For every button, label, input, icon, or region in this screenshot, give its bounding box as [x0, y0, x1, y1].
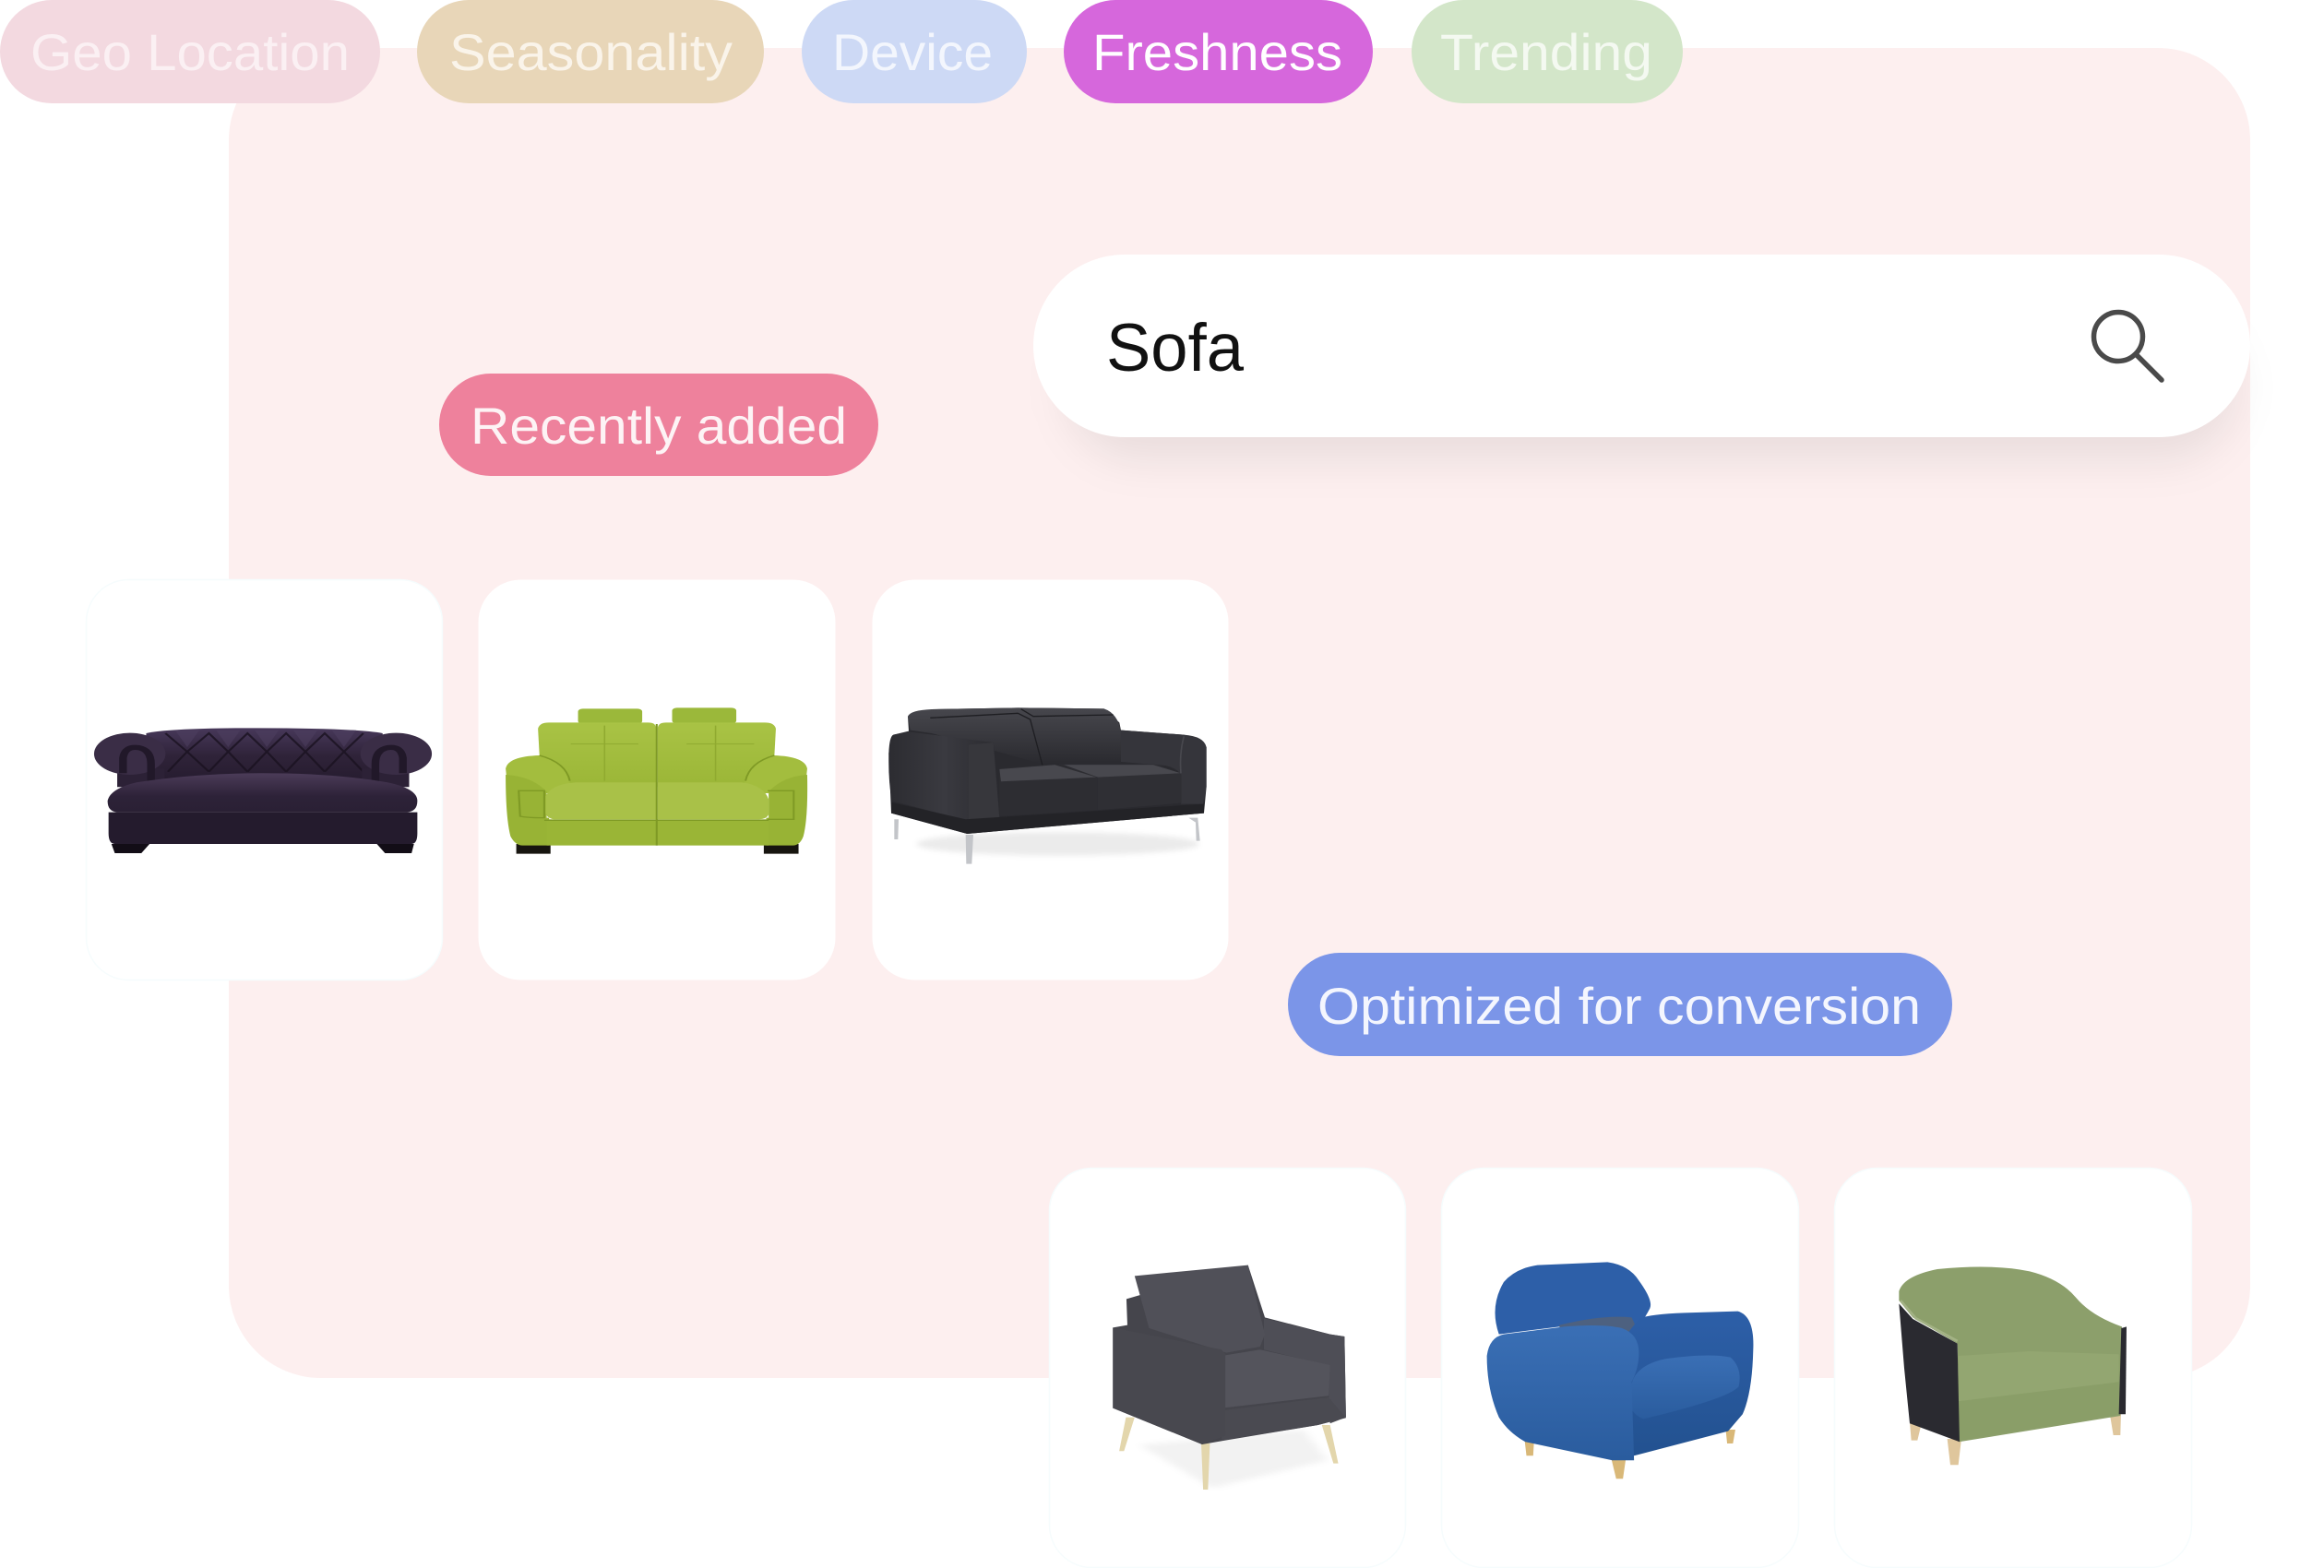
- chip: Seasonality: Seasonality: [449, 23, 733, 81]
- chip: Device: [802, 0, 1027, 103]
- search query text: Sofa: [1106, 311, 1244, 386]
- product card: black leather sofa: [873, 579, 1229, 980]
- search bar: [1033, 255, 2250, 461]
- product card: lime green sofa: [478, 579, 836, 980]
- product card: grey armchair: [1050, 1168, 1406, 1568]
- label: Optimized for conversion: Optimized for conversion: [1317, 977, 1921, 1035]
- label: Optimized for conversion: [1288, 953, 1952, 1056]
- chip: Freshness: Freshness: [1092, 23, 1342, 81]
- product card: sage green loveseat: [1834, 1168, 2192, 1568]
- label: Recently added: [439, 374, 878, 476]
- icon: magnifying glass: [2094, 312, 2162, 380]
- chip: Geo Location: [0, 0, 380, 103]
- chip: Trending: [1412, 0, 1683, 103]
- panel: pink background: [229, 48, 2250, 1378]
- chip: Freshness: [1064, 0, 1373, 103]
- filter chips row: [0, 0, 1683, 103]
- chip: Geo Location: Geo Location: [30, 23, 350, 81]
- chip: Trending: Trending: [1440, 23, 1652, 81]
- chip: Device: Device: [832, 23, 993, 81]
- product card: blue armchair: [1441, 1168, 1799, 1568]
- product card: purple chesterfield sofa: [87, 579, 443, 980]
- chip: Seasonality: [417, 0, 764, 103]
- label: Recently added: Recently added: [471, 397, 847, 455]
